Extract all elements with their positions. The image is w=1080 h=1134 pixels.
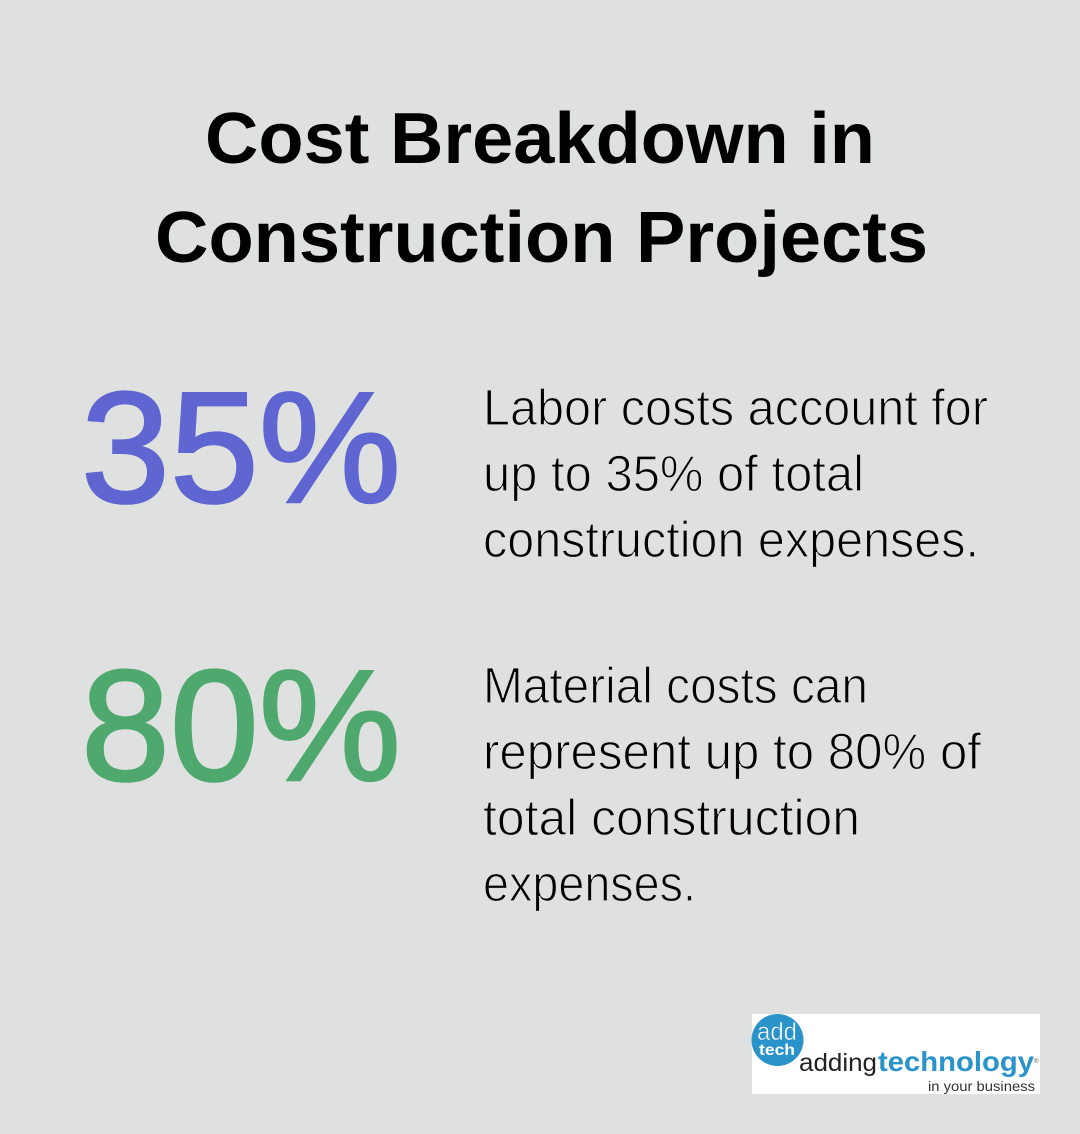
logo: adding technology: tech	[759, 1042, 795, 1059]
text: labor costs: up to 35% of total	[483, 445, 864, 502]
stat: 80%: 80%	[81, 638, 401, 814]
text: labor costs: construction expenses.	[483, 511, 979, 568]
icon: add tech circle	[752, 1014, 804, 1066]
title: Construction Projects	[155, 198, 928, 278]
logo: adding technology: in your business	[928, 1078, 1035, 1094]
text: labor costs	[483, 379, 988, 568]
text: material costs: Material costs can	[483, 657, 868, 714]
text: material costs: total construction	[483, 789, 860, 846]
logo: adding technology: technology	[878, 1046, 1034, 1077]
logo: adding technology: adding	[799, 1049, 877, 1077]
title: Cost Breakdown in	[205, 99, 875, 179]
text: material costs	[483, 657, 982, 912]
logo: adding technology: ®	[1034, 1058, 1039, 1065]
text: labor costs: Labor costs account for	[483, 379, 988, 436]
text: material costs: represent up to 80% of	[483, 723, 982, 780]
stat: 35%: 35%	[81, 360, 401, 536]
title	[155, 99, 928, 278]
logo: adding technology	[752, 1014, 1040, 1094]
logo: adding technology: add	[757, 1018, 797, 1046]
text: material costs: expenses.	[483, 855, 696, 912]
